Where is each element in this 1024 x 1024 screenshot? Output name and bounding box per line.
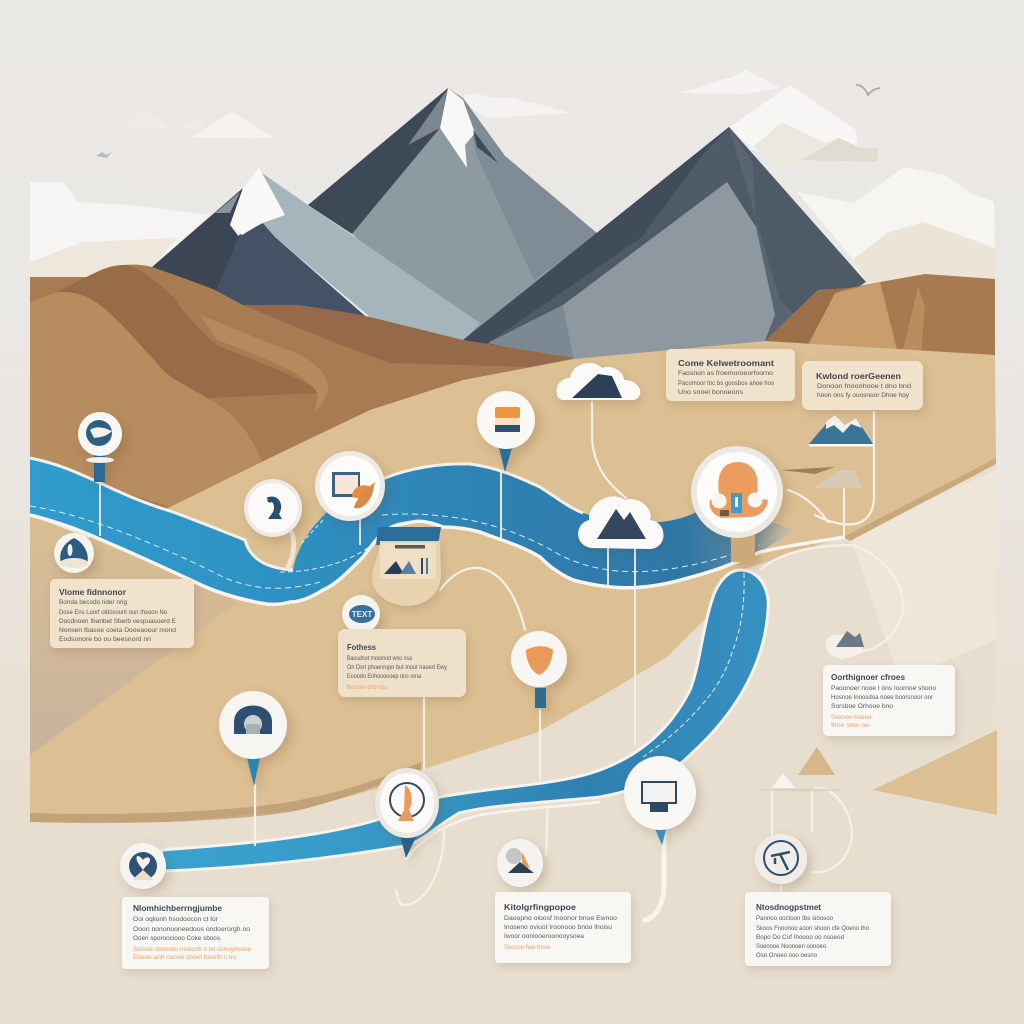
icon: volcano badge bbox=[497, 839, 543, 887]
text block A: Bonda becodo rider nrig bbox=[59, 599, 127, 606]
icon: small mountain bbox=[826, 631, 864, 658]
icon: orange pin bbox=[511, 631, 567, 708]
icon: pin 5 bbox=[477, 391, 535, 472]
river: lower sweep bbox=[161, 570, 768, 871]
text block G: Inoseno oviuot Iroonooo bnoo Ihoisu bbox=[504, 924, 612, 931]
text block C: Come Kelwetroomant bbox=[678, 358, 774, 368]
text block G: Soosoe hoe hose bbox=[504, 944, 550, 951]
text block C: Uno snoel bonoeons bbox=[678, 389, 744, 396]
text block B: On Dsrt phoenropn but Inout Iraoed Ewy bbox=[347, 664, 448, 671]
panel: sky and distant clouds bbox=[30, 70, 995, 282]
text block H: Ntosdnogpstmet bbox=[756, 902, 821, 912]
text block D: hoon ons fy ouosnoor Dhoe hoy bbox=[817, 392, 910, 399]
text block E: Paoonoer nooe t ons Ioornoe shono bbox=[831, 685, 936, 692]
icon: small label badge bbox=[342, 595, 380, 633]
text block B: Baosdnot moornod wno nsa bbox=[347, 655, 412, 662]
icon: orange ring badge bbox=[375, 768, 439, 858]
icon: profile pin bbox=[219, 691, 287, 786]
text block E: Sorsboe Orhooe bno bbox=[831, 703, 893, 710]
mountain: left peak bbox=[152, 168, 480, 342]
panel: shaded lower-left sand bbox=[30, 515, 237, 755]
text block H: Pannoo ooctoon tbs sioosoo bbox=[756, 915, 833, 922]
text block F: Ooi oqlionh hsodoocon ct tor bbox=[133, 916, 219, 923]
text block C bbox=[666, 349, 795, 401]
hills: brown right range bbox=[765, 274, 995, 358]
text block B: Enoodo Enhoooooep ons oma bbox=[347, 673, 421, 680]
text block G: Kitolgrfingpopoe bbox=[504, 902, 576, 912]
icon: mountain on far right bbox=[780, 415, 873, 488]
river: upper bend bbox=[30, 458, 845, 745]
text block A: Eodsonore bo ou beesnord nn bbox=[59, 636, 151, 643]
text block A: Vlome fidnnonor bbox=[59, 587, 127, 597]
text block D: Kwlond roerGeenen bbox=[816, 371, 901, 381]
text block E: Ihoe snor oe bbox=[831, 722, 869, 729]
text block D bbox=[802, 361, 923, 410]
icon: cloud mountain top bbox=[556, 363, 640, 400]
text block C: Faosnon as froemoroeorfoorno bbox=[678, 370, 773, 377]
connector lines bbox=[255, 402, 903, 920]
text block B: Fothess bbox=[347, 642, 376, 652]
text block A: Nonsen Ibasoe coeta Dooeaoour mond bbox=[59, 627, 176, 634]
text block F bbox=[122, 897, 269, 969]
text block F: Ensoo anh nsooe shoet bsonb s nu bbox=[133, 954, 236, 961]
icon: small label badge: TEXT bbox=[352, 610, 372, 619]
text block H: Bopo Do Cuf Ihoooo oo nsoeod bbox=[756, 934, 844, 941]
text block E: Oorthignoer cfroes bbox=[831, 672, 905, 682]
text block A bbox=[50, 579, 194, 648]
text block H: Skoos Fnoonoo aoon shoon cfe Qoeno tho bbox=[756, 925, 869, 932]
icon: pin 1 bbox=[78, 412, 122, 482]
text block H: Soenooe Noonoen oonoeo bbox=[756, 943, 826, 950]
text block A: Docdnoen Ibanbet Sberb vespuasoerd E bbox=[59, 618, 177, 625]
text block A: Dose Ens Luorf oldosount oun Ihsoon No bbox=[59, 609, 167, 616]
icon: badge 4 bbox=[315, 451, 385, 521]
text block F: Nlomhichberrngjumbe bbox=[133, 903, 222, 913]
hills: brown left range bbox=[30, 265, 574, 510]
text block B: Bonsen ond nos bbox=[347, 684, 388, 691]
icon: tan tools bubble bbox=[372, 541, 441, 606]
icon: start badge bbox=[120, 843, 166, 889]
icon: monitor pin bbox=[624, 756, 696, 845]
text block E: Soomoe Inoeen bbox=[831, 714, 871, 721]
small decorative desert peaks bbox=[758, 747, 842, 792]
text block G bbox=[495, 892, 631, 963]
icon: orange figure badge bbox=[691, 446, 783, 562]
text block G: Iwoor oonlooeroonooysoea bbox=[504, 933, 584, 940]
icon: badge 2 bbox=[54, 533, 94, 573]
icon: cloud mountain centre bbox=[578, 496, 664, 549]
icon: tool badge bbox=[755, 834, 807, 884]
panel: pale foothills below the plain bbox=[30, 460, 997, 1024]
panel: sand plain bbox=[30, 341, 996, 823]
text block F: Sonoot oboosns nsoocth s bo osnoynsooe bbox=[133, 946, 251, 953]
mountain: centre peak bbox=[308, 88, 598, 345]
text block E: Hosnoe Inoosdoa noee boorsnoor onr bbox=[831, 694, 934, 701]
text block F: Ooon nononooneedoos ondoerorgh oo bbox=[133, 926, 250, 933]
text block B bbox=[338, 629, 466, 697]
icon: badge 3 bbox=[244, 479, 302, 537]
text block E bbox=[823, 665, 955, 736]
text block G: Daoopno oloosf Inoonor bnoe Ewnoo bbox=[504, 915, 617, 922]
text block F: Ooeri sporoociooo Coke sboos bbox=[133, 935, 221, 942]
text block C: Pacomoor tnc bs goosbos ahoe hos bbox=[678, 380, 775, 387]
text block D: Donoon fnoonhooe t dno bnd bbox=[817, 383, 911, 390]
text block H: Oso Onoeo noo oesno bbox=[756, 952, 817, 959]
text block H bbox=[745, 892, 891, 966]
mountain: right peak bbox=[463, 127, 866, 362]
